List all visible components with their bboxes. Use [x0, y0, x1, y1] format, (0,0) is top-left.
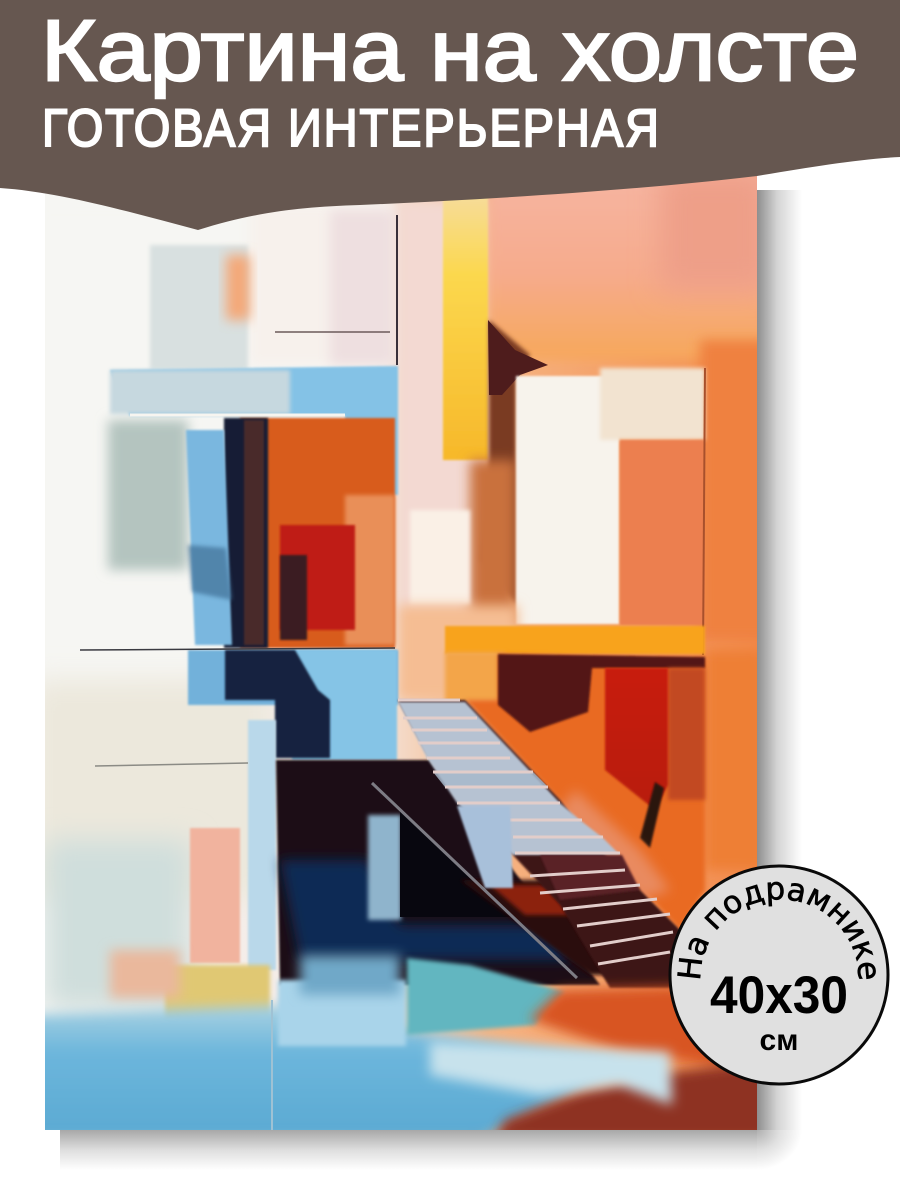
left pale wall [207, 204, 389, 650]
staircase [398, 700, 680, 988]
fine lines [396, 215, 398, 365]
bottom blue floor [30, 1005, 620, 1140]
right panel orange [620, 440, 704, 625]
badge curved text: На подрамнике [677, 882, 876, 980]
upper steps fill [398, 702, 620, 855]
badge: size [668, 864, 890, 1086]
central orange block [240, 418, 395, 648]
subtitle: ГОТОВАЯ ИНТЕРЬЕРНАЯ [42, 99, 659, 158]
dark vertical strip [224, 418, 268, 648]
pale stair panel [457, 806, 513, 888]
header banner [0, 0, 900, 230]
painting [20, 170, 770, 1140]
lower right orange block [465, 654, 705, 930]
small light window [410, 510, 470, 605]
yellow column [443, 195, 488, 460]
bottom right red-brown [524, 978, 719, 1068]
upper right orange-pink [488, 170, 768, 360]
badge size value: 40x30 [710, 966, 848, 1025]
dark vertical behind white panel [480, 320, 530, 605]
top blue bar [110, 366, 398, 495]
middle blue band [188, 650, 398, 705]
canvas shadow [60, 190, 802, 1170]
lower left haze and pink panel [45, 840, 190, 1010]
grey-blue upper left block [150, 245, 248, 370]
orange shelf [445, 626, 705, 654]
badge unit: см [760, 1024, 798, 1057]
blue vertical strip [186, 430, 232, 645]
title: Картина на холсте [41, 3, 859, 99]
tall light blue column [248, 720, 276, 970]
white panel [516, 376, 619, 624]
dark lower mass [276, 760, 600, 985]
